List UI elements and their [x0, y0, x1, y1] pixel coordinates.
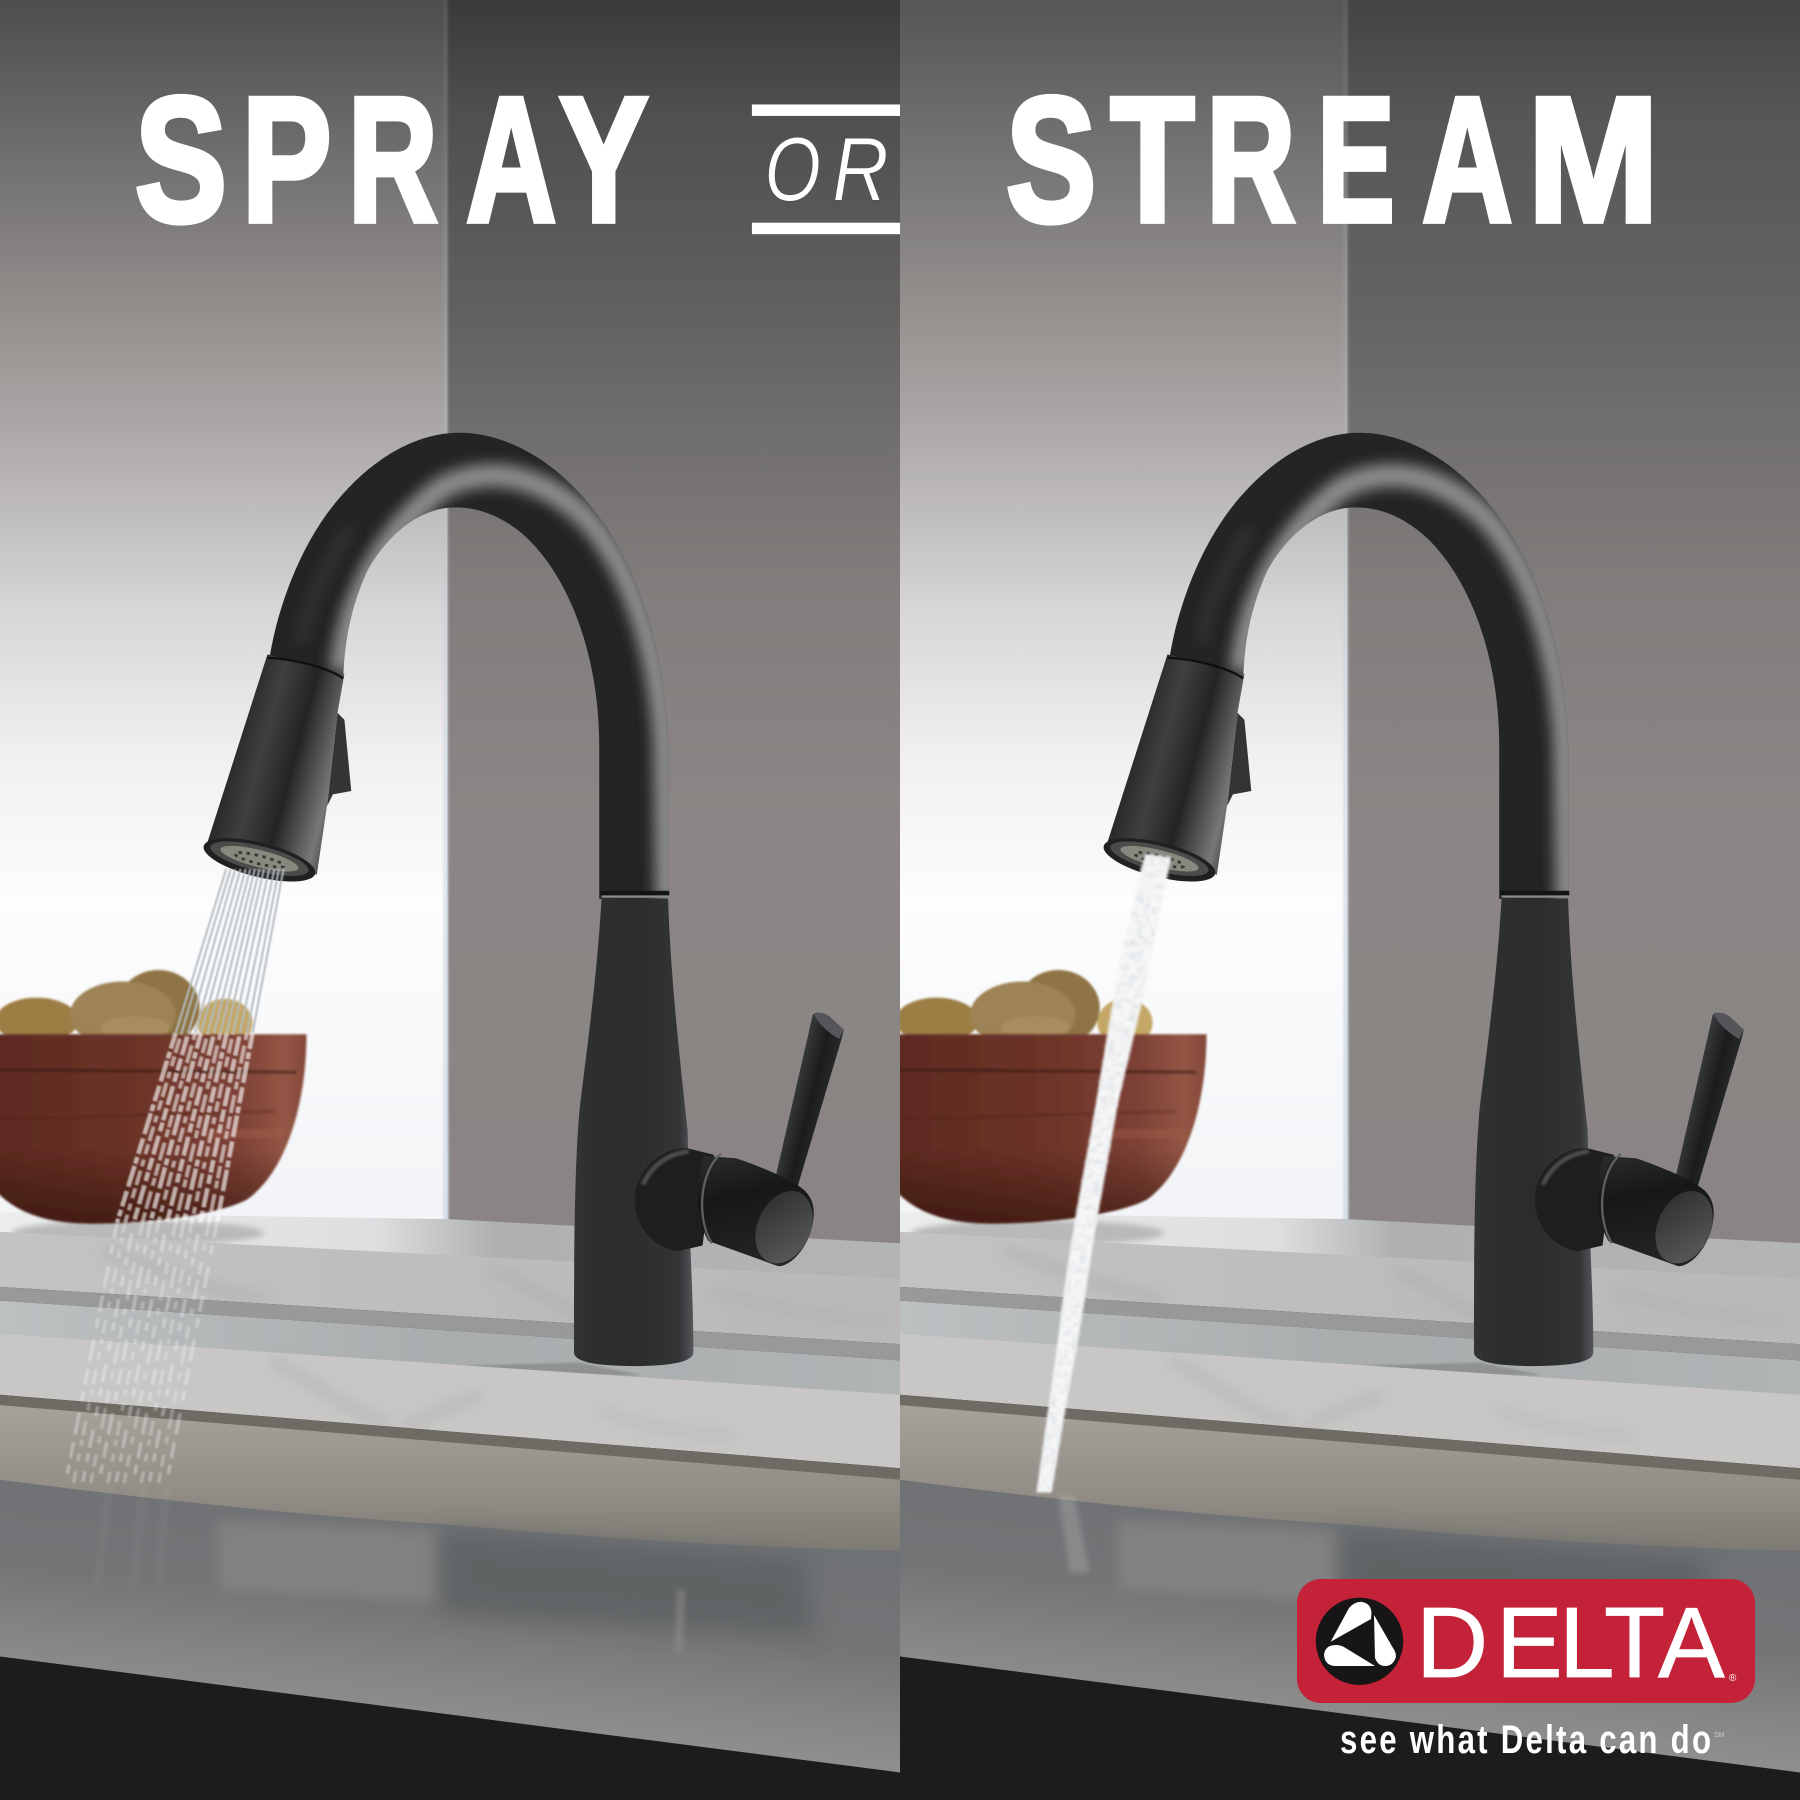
rule below OR: [752, 223, 900, 234]
heading: SPRAY: S: [135, 60, 227, 259]
top lightening of wall: [900, 0, 1800, 53]
heading: STREAM: E: [1317, 60, 1395, 259]
marble counter and sink: [900, 1212, 1800, 1800]
heading: SPRAY: R: [348, 60, 438, 259]
Delta logo: [1297, 1579, 1755, 1762]
heading: STREAM: A: [1422, 60, 1512, 259]
marble counter and sink: [0, 1212, 900, 1800]
registered mark: ®: [1729, 1673, 1737, 1684]
service mark: SM: [1714, 1732, 1725, 1739]
heading: SPRAY: [135, 60, 648, 259]
label: OR: [765, 118, 889, 221]
solid water stream: [1037, 854, 1171, 1573]
heading: SPRAY: A: [466, 60, 556, 259]
logo red badge: [1297, 1579, 1755, 1703]
faucet: [1100, 433, 1744, 1366]
heading: SPRAY: Y: [559, 61, 648, 259]
heading: STREAM: [1006, 60, 1659, 259]
heading: STREAM: T: [1110, 60, 1195, 259]
wall backdrop: [0, 0, 900, 1251]
panel: spray side: [0, 0, 900, 1800]
heading: STREAM: R: [1206, 61, 1295, 259]
bowl of kiwi fruit: [889, 970, 1207, 1224]
bowl of kiwi fruit: [0, 970, 307, 1224]
faucet: [200, 433, 844, 1366]
wall backdrop: [900, 0, 1800, 1251]
heading: STREAM: S: [1006, 60, 1096, 259]
heading: SPRAY: P: [242, 61, 332, 259]
icon: Delta triangle mark: [1316, 1598, 1403, 1685]
label: OR: O: [765, 120, 821, 221]
rule above OR: [752, 104, 900, 116]
wordmark: DELTA: DELTA: [1416, 1587, 1725, 1699]
heading: STREAM: M: [1528, 60, 1659, 259]
label: OR: R: [832, 118, 889, 220]
panel: stream side: [889, 0, 1800, 1800]
spray water streams: [66, 868, 285, 1484]
tagline: see what Delta can do: [1340, 1717, 1711, 1762]
